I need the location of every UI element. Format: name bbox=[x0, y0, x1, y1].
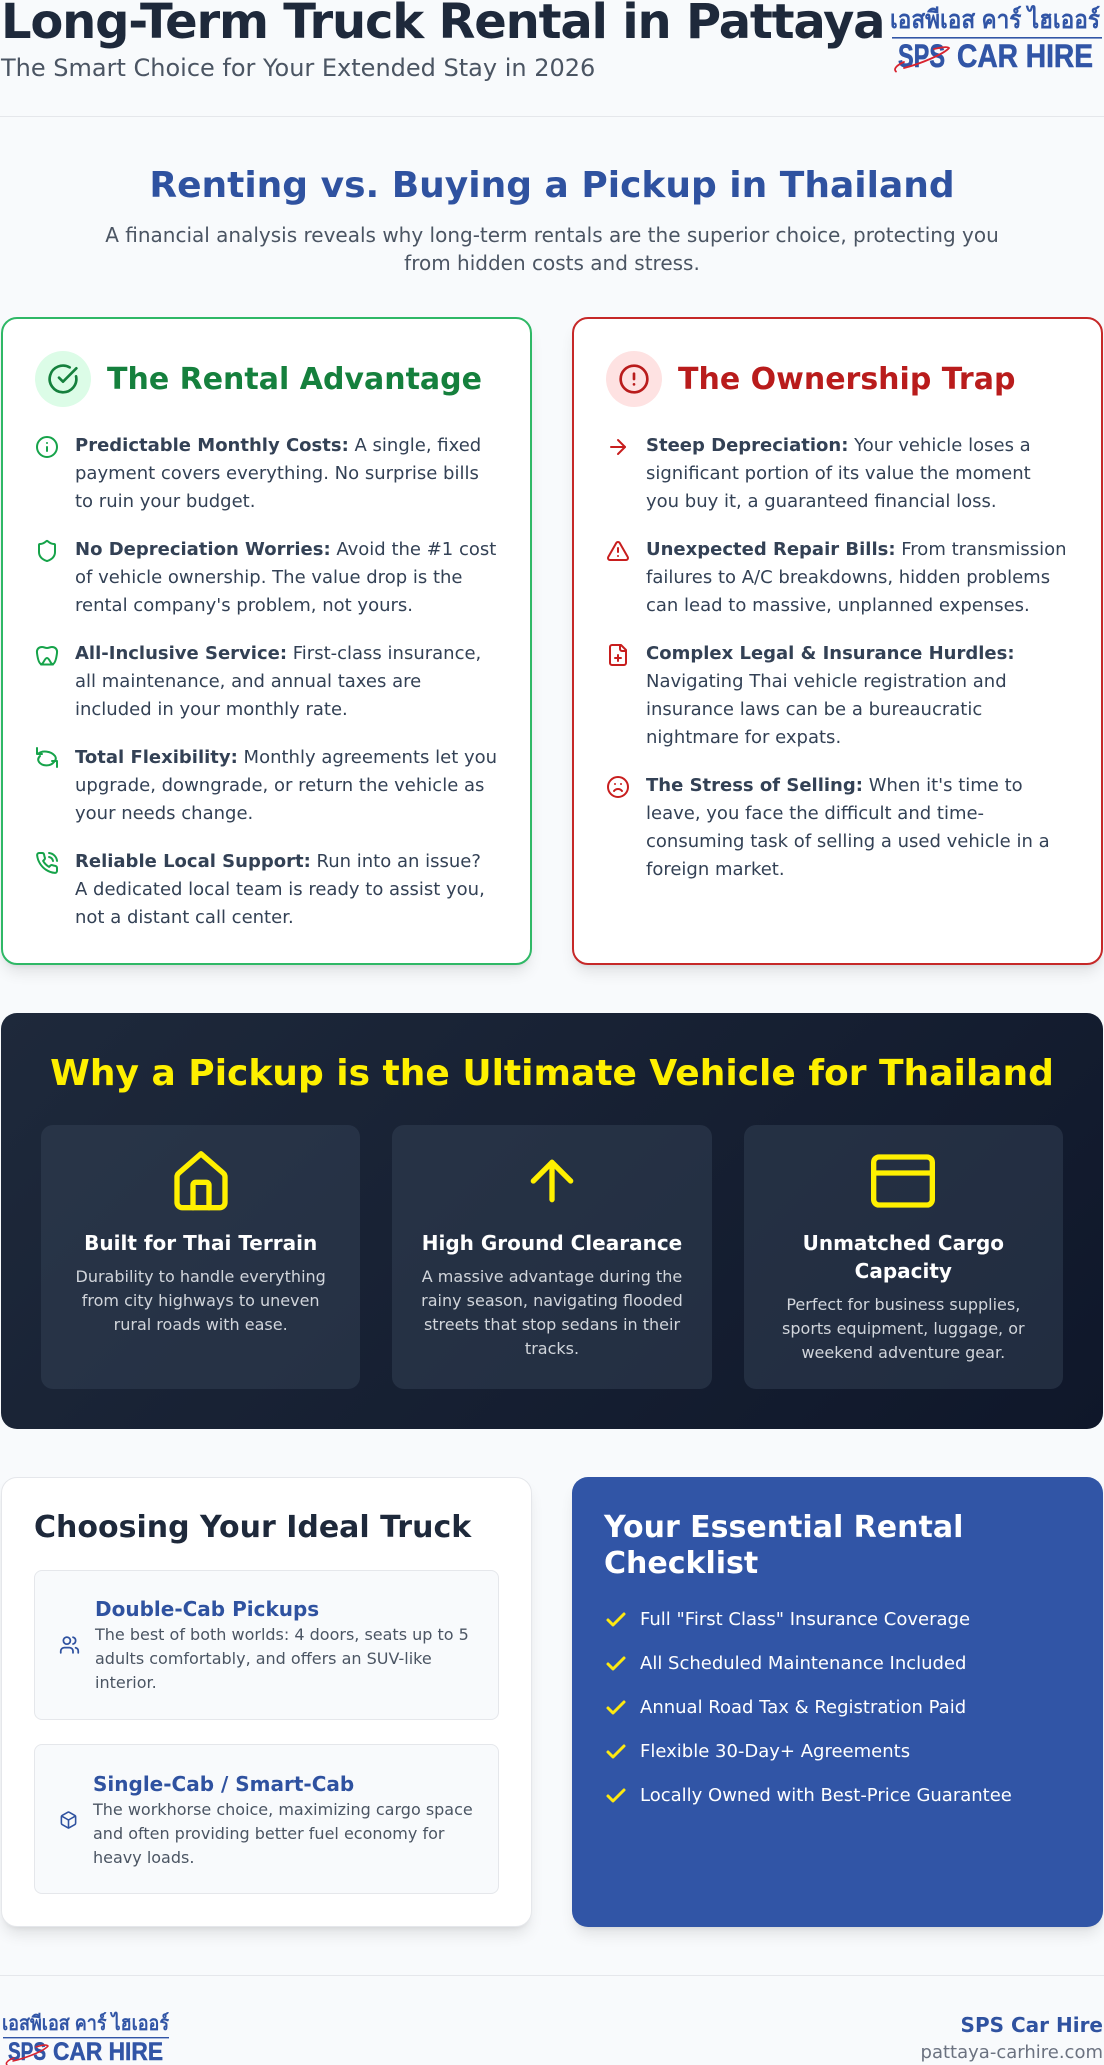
item: complex legal and insurance hurdles: Navigating Thai vehicle registration and bbox=[646, 671, 1007, 692]
icon: check circle bbox=[35, 351, 91, 407]
footer url: pattaya-carhire.com bbox=[921, 2042, 1103, 2063]
item: reliable local support bbox=[36, 851, 485, 928]
feature: unmatched cargo capacity: Perfect for business supplies, bbox=[786, 1295, 1020, 1314]
subtitle: The Smart Choice for Your Extended Stay in 2026 bbox=[1, 54, 595, 82]
item: steep depreciation: you buy it, a guaranteed financial loss. bbox=[646, 491, 997, 512]
item: all-inclusive service bbox=[36, 643, 481, 720]
option: double-cab: adults comfortably, and offers an SUV-like bbox=[95, 1649, 432, 1668]
feature: unmatched cargo capacity: weekend adventure gear. bbox=[801, 1343, 1005, 1362]
item: steep depreciation bbox=[610, 435, 1031, 512]
section intro text: A financial analysis reveals why long-term rentals are the superior choice, protecting you bbox=[105, 223, 999, 247]
heading: checklist bbox=[604, 1510, 963, 1581]
logo: SPS Car Hire header: SPS bbox=[898, 38, 945, 74]
panel: essential rental checklist: Annual Road Tax & Registration Paid bbox=[640, 1697, 966, 1718]
option: double-cab: The best of both worlds: 4 doors, seats up to 5 bbox=[95, 1625, 469, 1644]
option: double-cab: interior. bbox=[95, 1673, 157, 1692]
item: unexpected repair bills: Unexpected Repair Bills: From transmission bbox=[646, 539, 1067, 560]
item: complex legal and insurance hurdles bbox=[609, 643, 1015, 748]
feature: high ground clearance: A massive advantage during the bbox=[422, 1267, 682, 1286]
section intro text bbox=[105, 223, 999, 275]
item: predictable monthly costs bbox=[36, 435, 481, 512]
section heading: Renting vs. Buying a Pickup in Thailand bbox=[149, 165, 955, 206]
item: all-inclusive service: All-Inclusive Service: First-class insurance, bbox=[75, 643, 481, 664]
item: all-inclusive service: included in your monthly rate. bbox=[75, 699, 348, 720]
heading: the rental advantage: The Rental Advantage bbox=[107, 362, 482, 397]
item: total flexibility: Total Flexibility: Monthly agreements let you bbox=[75, 747, 497, 768]
check item: flexible agreements bbox=[606, 1741, 910, 1762]
panel: essential rental checklist bbox=[572, 1477, 1103, 1927]
item: the stress of selling: consuming task of selling a used vehicle in a bbox=[646, 831, 1050, 852]
option: double-cab: Double-Cab Pickups bbox=[95, 1597, 319, 1621]
item: predictable monthly costs: payment covers everything. No surprise bills bbox=[75, 463, 479, 484]
panel: essential rental checklist: All Scheduled Maintenance Included bbox=[640, 1653, 966, 1674]
panel: essential rental checklist: Locally Owned with Best-Price Guarantee bbox=[640, 1785, 1012, 1806]
item: no depreciation worries: of vehicle ownership. The value drop is the bbox=[75, 567, 462, 588]
icon: cargo bbox=[871, 1154, 935, 1208]
feature: high ground clearance: rainy season, navigating flooded bbox=[421, 1291, 683, 1310]
option: single-cab: and often providing better fuel economy for bbox=[93, 1824, 444, 1843]
feature: unmatched cargo capacity: Capacity bbox=[855, 1259, 952, 1283]
heading: the ownership trap: The Ownership Trap bbox=[678, 362, 1015, 397]
icon: users bbox=[60, 1636, 80, 1654]
option: single-cab bbox=[34, 1744, 499, 1894]
icon: alert circle bbox=[606, 351, 662, 407]
panel: the rental advantage bbox=[1, 317, 532, 965]
item: reliable local support: A dedicated local team is ready to assist you, bbox=[75, 879, 485, 900]
heading: checklist: Checklist bbox=[604, 1546, 758, 1581]
feature: high ground clearance: High Ground Clearance bbox=[422, 1231, 682, 1255]
item: unexpected repair bills: can lead to massive, unplanned expenses. bbox=[646, 595, 1030, 616]
footer brand name: SPS Car Hire bbox=[961, 2013, 1103, 2037]
feature: unmatched cargo capacity bbox=[744, 1125, 1063, 1389]
panel: why a pickup bbox=[1, 1013, 1103, 1429]
item: all-inclusive service: all maintenance, and annual taxes are bbox=[75, 671, 421, 692]
item: total flexibility bbox=[36, 747, 497, 824]
feature: built for thai terrain: from city highways to uneven bbox=[82, 1291, 320, 1310]
item: complex legal and insurance hurdles: insurance laws can be a bureaucratic bbox=[646, 699, 982, 720]
item: steep depreciation: significant portion of its value the moment bbox=[646, 463, 1031, 484]
item: reliable local support: not a distant call center. bbox=[75, 907, 294, 928]
item: unexpected repair bills bbox=[607, 539, 1067, 616]
item: the stress of selling: The Stress of Selling: When it's time to bbox=[646, 775, 1023, 796]
feature: unmatched cargo capacity: Unmatched Cargo bbox=[803, 1231, 1004, 1255]
item: no depreciation worries bbox=[38, 539, 496, 616]
feature: built for thai terrain: rural roads with ease. bbox=[114, 1315, 288, 1334]
section intro text: from hidden costs and stress. bbox=[404, 251, 700, 275]
item: the stress of selling bbox=[607, 775, 1050, 880]
feature: high ground clearance bbox=[392, 1125, 712, 1389]
heading: choosing your ideal truck: Choosing Your Ideal Truck bbox=[34, 1510, 471, 1545]
check item: insurance bbox=[606, 1609, 970, 1630]
item: no depreciation worries: rental company's problem, not yours. bbox=[75, 595, 413, 616]
icon: arrow up bbox=[530, 1160, 574, 1202]
panel: the ownership trap bbox=[572, 317, 1103, 965]
heading: why a pickup: Why a Pickup is the Ultimate Vehicle for Thailand bbox=[50, 1053, 1054, 1094]
item: no depreciation worries: No Depreciation Worries: Avoid the #1 cost bbox=[75, 539, 496, 560]
option: single-cab: heavy loads. bbox=[93, 1848, 194, 1867]
item: complex legal and insurance hurdles: Complex Legal & Insurance Hurdles: bbox=[646, 643, 1015, 664]
check item: locally owned bbox=[606, 1785, 1012, 1806]
icon: box bbox=[60, 1811, 76, 1829]
option: double-cab bbox=[34, 1570, 499, 1720]
check item: road tax bbox=[606, 1697, 966, 1718]
logo: SPS Car Hire header bbox=[890, 4, 1102, 74]
item: the stress of selling: foreign market. bbox=[646, 859, 785, 880]
panel: essential rental checklist: Full "First Class" Insurance Coverage bbox=[640, 1609, 970, 1630]
heading: checklist: Your Essential Rental bbox=[604, 1510, 963, 1545]
panel: essential rental checklist: Flexible 30-Day+ Agreements bbox=[640, 1741, 910, 1762]
option: single-cab: The workhorse choice, maximizing cargo space bbox=[93, 1800, 473, 1819]
item: the stress of selling: leave, you face the difficult and time- bbox=[646, 803, 984, 824]
item: reliable local support: Reliable Local Support: Run into an issue? bbox=[75, 851, 481, 872]
item: complex legal and insurance hurdles: nightmare for expats. bbox=[646, 727, 841, 748]
icon: house bbox=[174, 1151, 228, 1210]
panel: choosing your ideal truck bbox=[1, 1477, 532, 1927]
item: total flexibility: upgrade, downgrade, or return the vehicle as bbox=[75, 775, 484, 796]
header bbox=[0, 0, 1104, 117]
feature: built for thai terrain: Built for Thai Terrain bbox=[84, 1231, 317, 1255]
feature: high ground clearance: streets that stop sedans in their bbox=[424, 1315, 680, 1334]
item: total flexibility: your needs change. bbox=[75, 803, 253, 824]
logo: SPS Car Hire footer bbox=[2, 2011, 169, 2065]
feature: unmatched cargo capacity: sports equipment, luggage, or bbox=[782, 1319, 1025, 1338]
option: single-cab: Single-Cab / Smart-Cab bbox=[93, 1772, 354, 1796]
item: predictable monthly costs: to ruin your budget. bbox=[75, 491, 255, 512]
feature: built for thai terrain: Durability to handle everything bbox=[76, 1267, 326, 1286]
footer bbox=[0, 1975, 1104, 2065]
item: predictable monthly costs: Predictable Monthly Costs: A single, fixed bbox=[75, 435, 481, 456]
check item: maintenance bbox=[606, 1653, 966, 1674]
feature: high ground clearance: tracks. bbox=[525, 1339, 579, 1358]
item: steep depreciation: Steep Depreciation: Your vehicle loses a bbox=[646, 435, 1031, 456]
feature: built for thai terrain bbox=[41, 1125, 360, 1389]
item: unexpected repair bills: failures to A/C breakdowns, hidden problems bbox=[646, 567, 1050, 588]
